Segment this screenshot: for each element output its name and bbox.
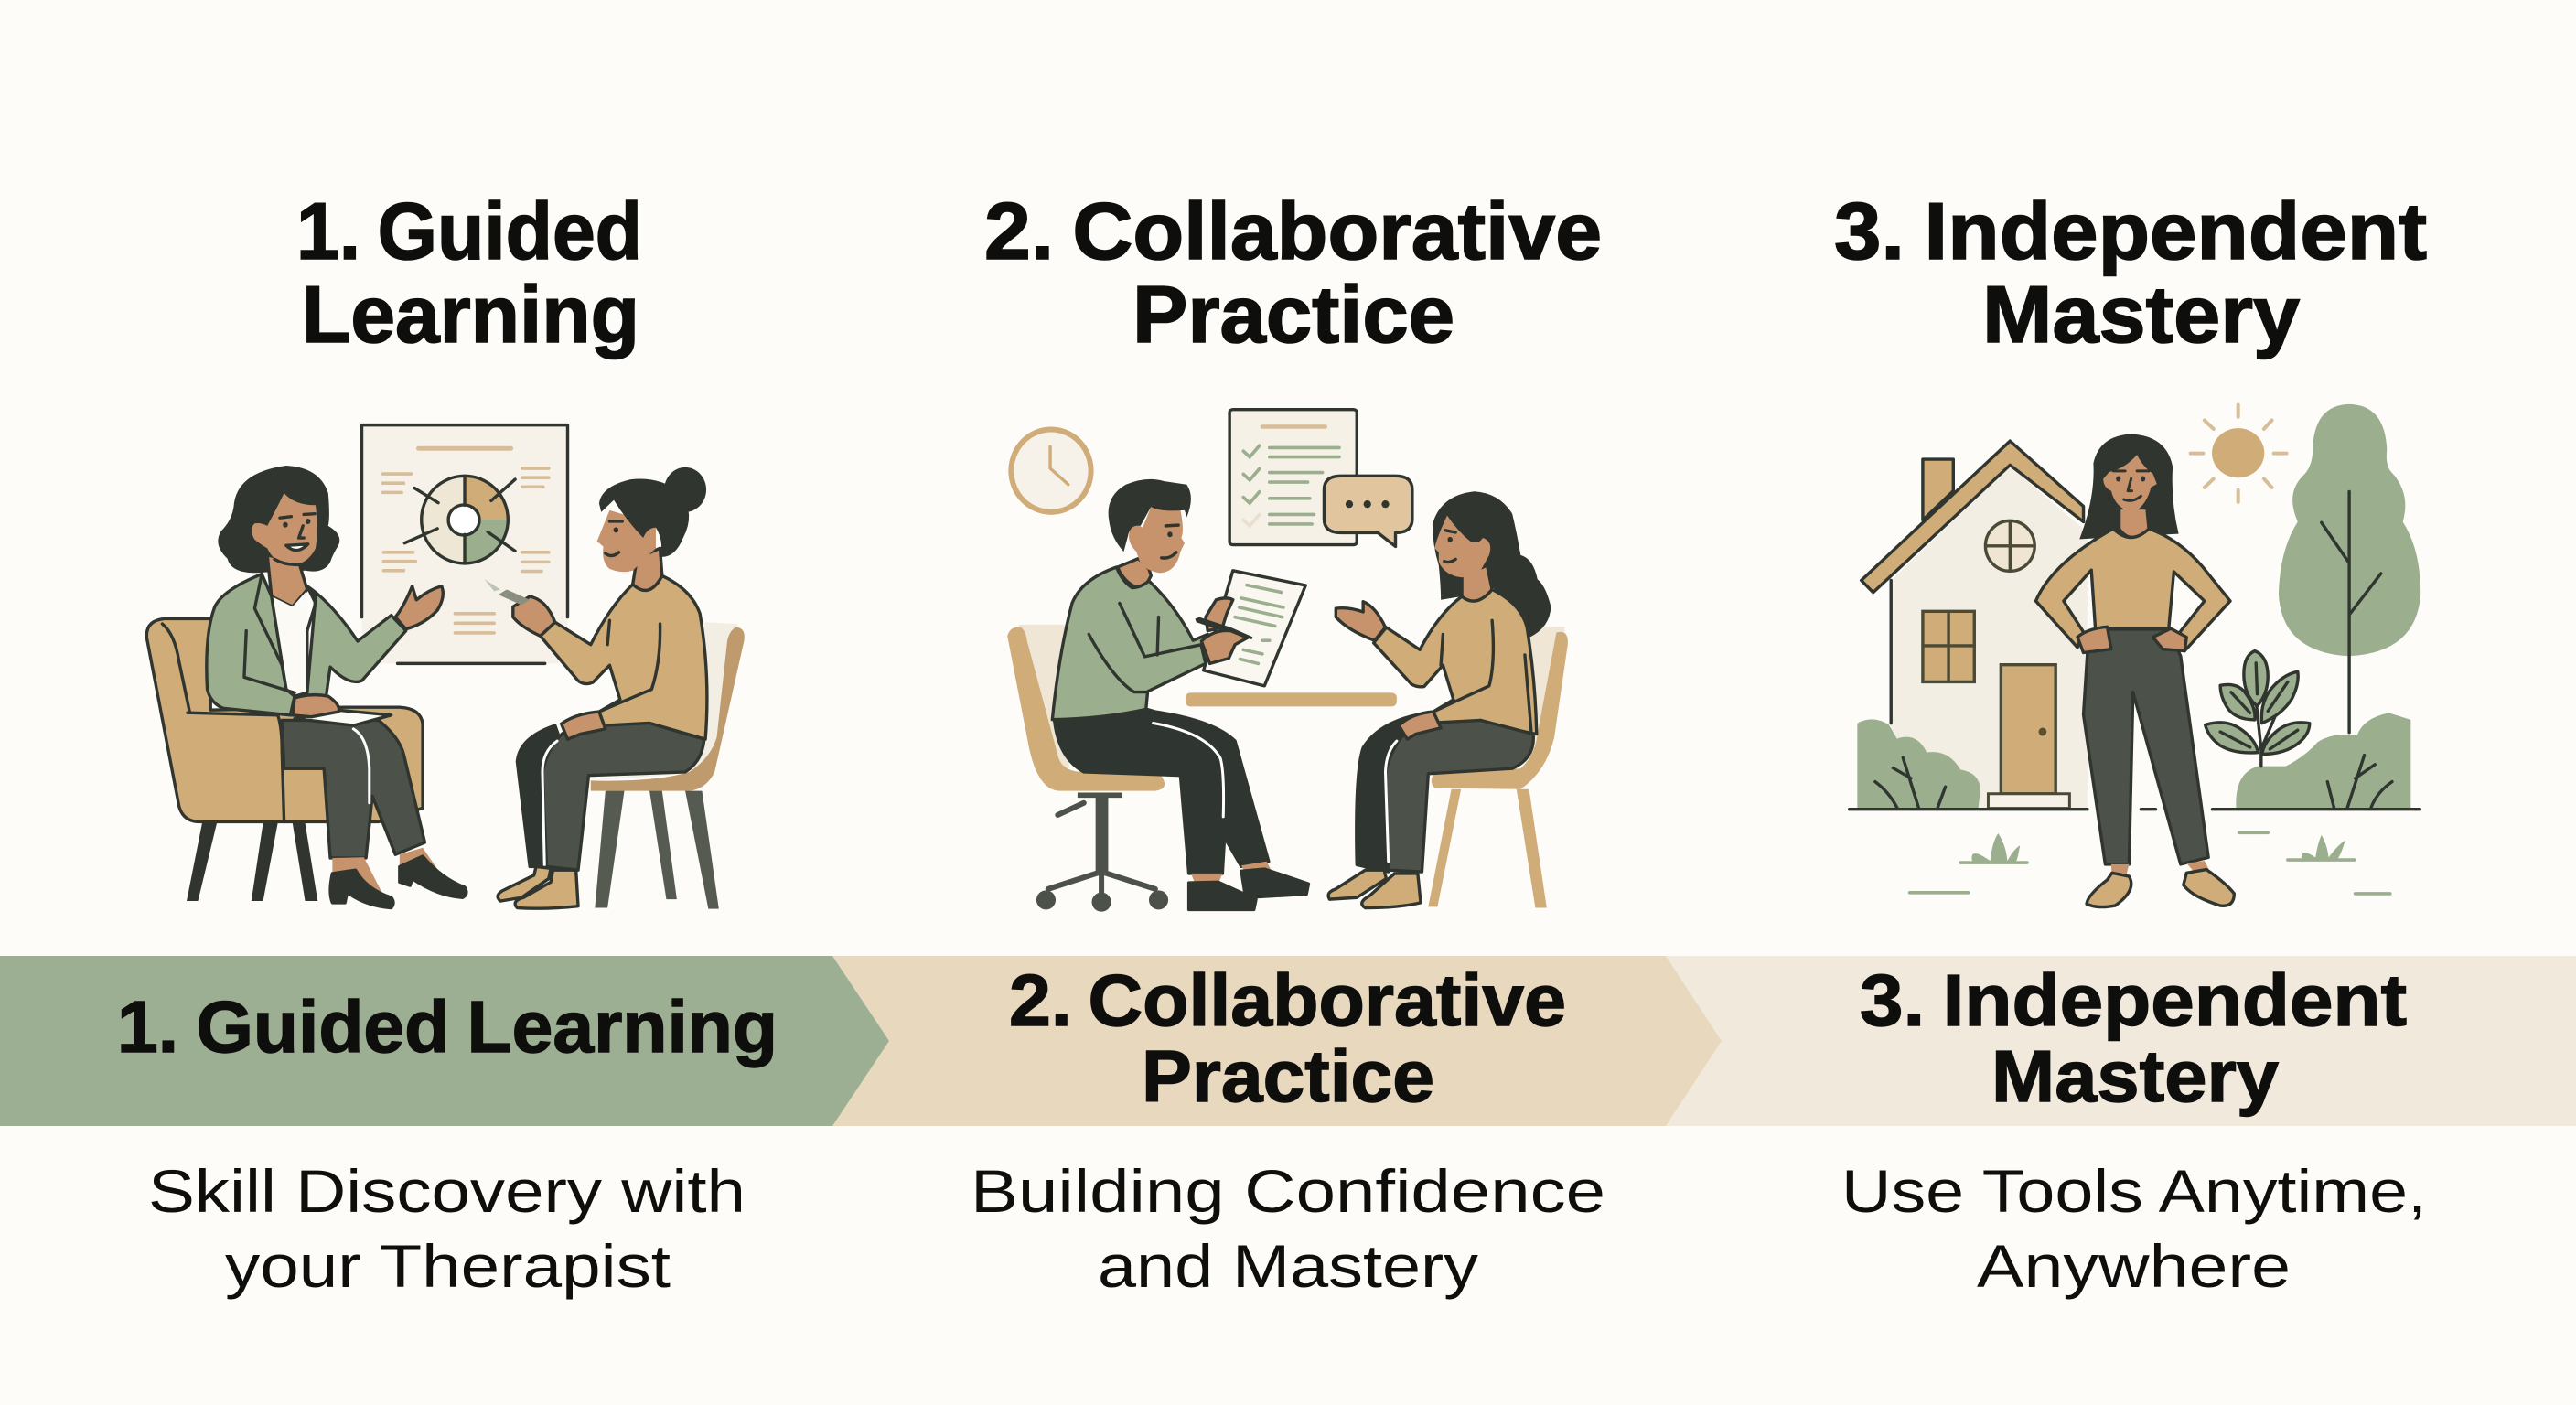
woman <box>1328 491 1551 908</box>
checklist <box>1229 410 1357 545</box>
progress banner <box>0 956 2576 1126</box>
standing woman <box>2036 434 2234 907</box>
title: 3. Independent Mastery <box>1834 186 2427 359</box>
banner label 2 <box>1009 960 1566 1117</box>
title: 2. Collaborative Practice: Practice <box>1132 269 1454 359</box>
poster with wheel chart <box>362 425 568 663</box>
title: 1. Guided Learning: Learning <box>302 269 639 359</box>
banner segment 3 <box>1666 956 2576 1126</box>
house <box>1862 441 2088 809</box>
description 2: Building Confidence <box>971 1157 1605 1225</box>
table <box>1186 692 1397 706</box>
wall clock <box>1011 430 1091 512</box>
tree <box>2279 404 2420 733</box>
description 1: your Therapist <box>225 1232 671 1300</box>
title: 2. Collaborative Practice: 2. Collaborative <box>984 186 1602 276</box>
title: 1. Guided Learning: 1. Guided <box>296 186 642 276</box>
banner label 2: Practice <box>1142 1035 1434 1117</box>
banner segment 1 <box>0 956 889 1126</box>
right chair <box>1428 627 1568 908</box>
left bush <box>1857 719 1980 809</box>
ground and grass <box>1850 810 2420 894</box>
banner label 2: 2. Collaborative <box>1009 960 1566 1041</box>
banner label 3 <box>1860 960 2407 1117</box>
left swivel chair <box>1007 625 1168 912</box>
title: 1. Guided Learning <box>296 186 642 359</box>
banner segment 2 <box>832 956 1722 1126</box>
description 2: and Mastery <box>1098 1232 1478 1300</box>
description 3: Use Tools Anytime, <box>1841 1157 2427 1225</box>
description 3 <box>1841 1157 2427 1300</box>
armchair <box>146 618 423 901</box>
banner label 3: 3. Independent <box>1860 960 2407 1041</box>
leafy plant <box>2206 651 2310 767</box>
banner label 3: Mastery <box>1991 1035 2280 1117</box>
title: 3. Independent Mastery: 3. Independent <box>1834 186 2427 276</box>
banner label 1: 1. Guided Learning <box>117 986 778 1067</box>
description 3: Anywhere <box>1977 1232 2291 1300</box>
sun <box>2191 405 2287 502</box>
description 1: Skill Discovery with <box>148 1157 746 1225</box>
illustration: independent woman at home <box>1850 404 2420 907</box>
client <box>485 467 707 908</box>
illustration: collaborative practice at a table <box>1007 410 1568 912</box>
title: 3. Independent Mastery: Mastery <box>1982 269 2300 359</box>
right bush <box>2236 713 2410 809</box>
man with clipboard <box>1052 479 1308 909</box>
therapist <box>207 466 467 908</box>
description 2 <box>971 1157 1605 1300</box>
title: 2. Collaborative Practice <box>984 186 1602 359</box>
illustration: therapist and client at poster <box>146 425 745 909</box>
description 1 <box>148 1157 746 1300</box>
speech bubble <box>1324 476 1412 546</box>
client chair <box>591 622 745 909</box>
